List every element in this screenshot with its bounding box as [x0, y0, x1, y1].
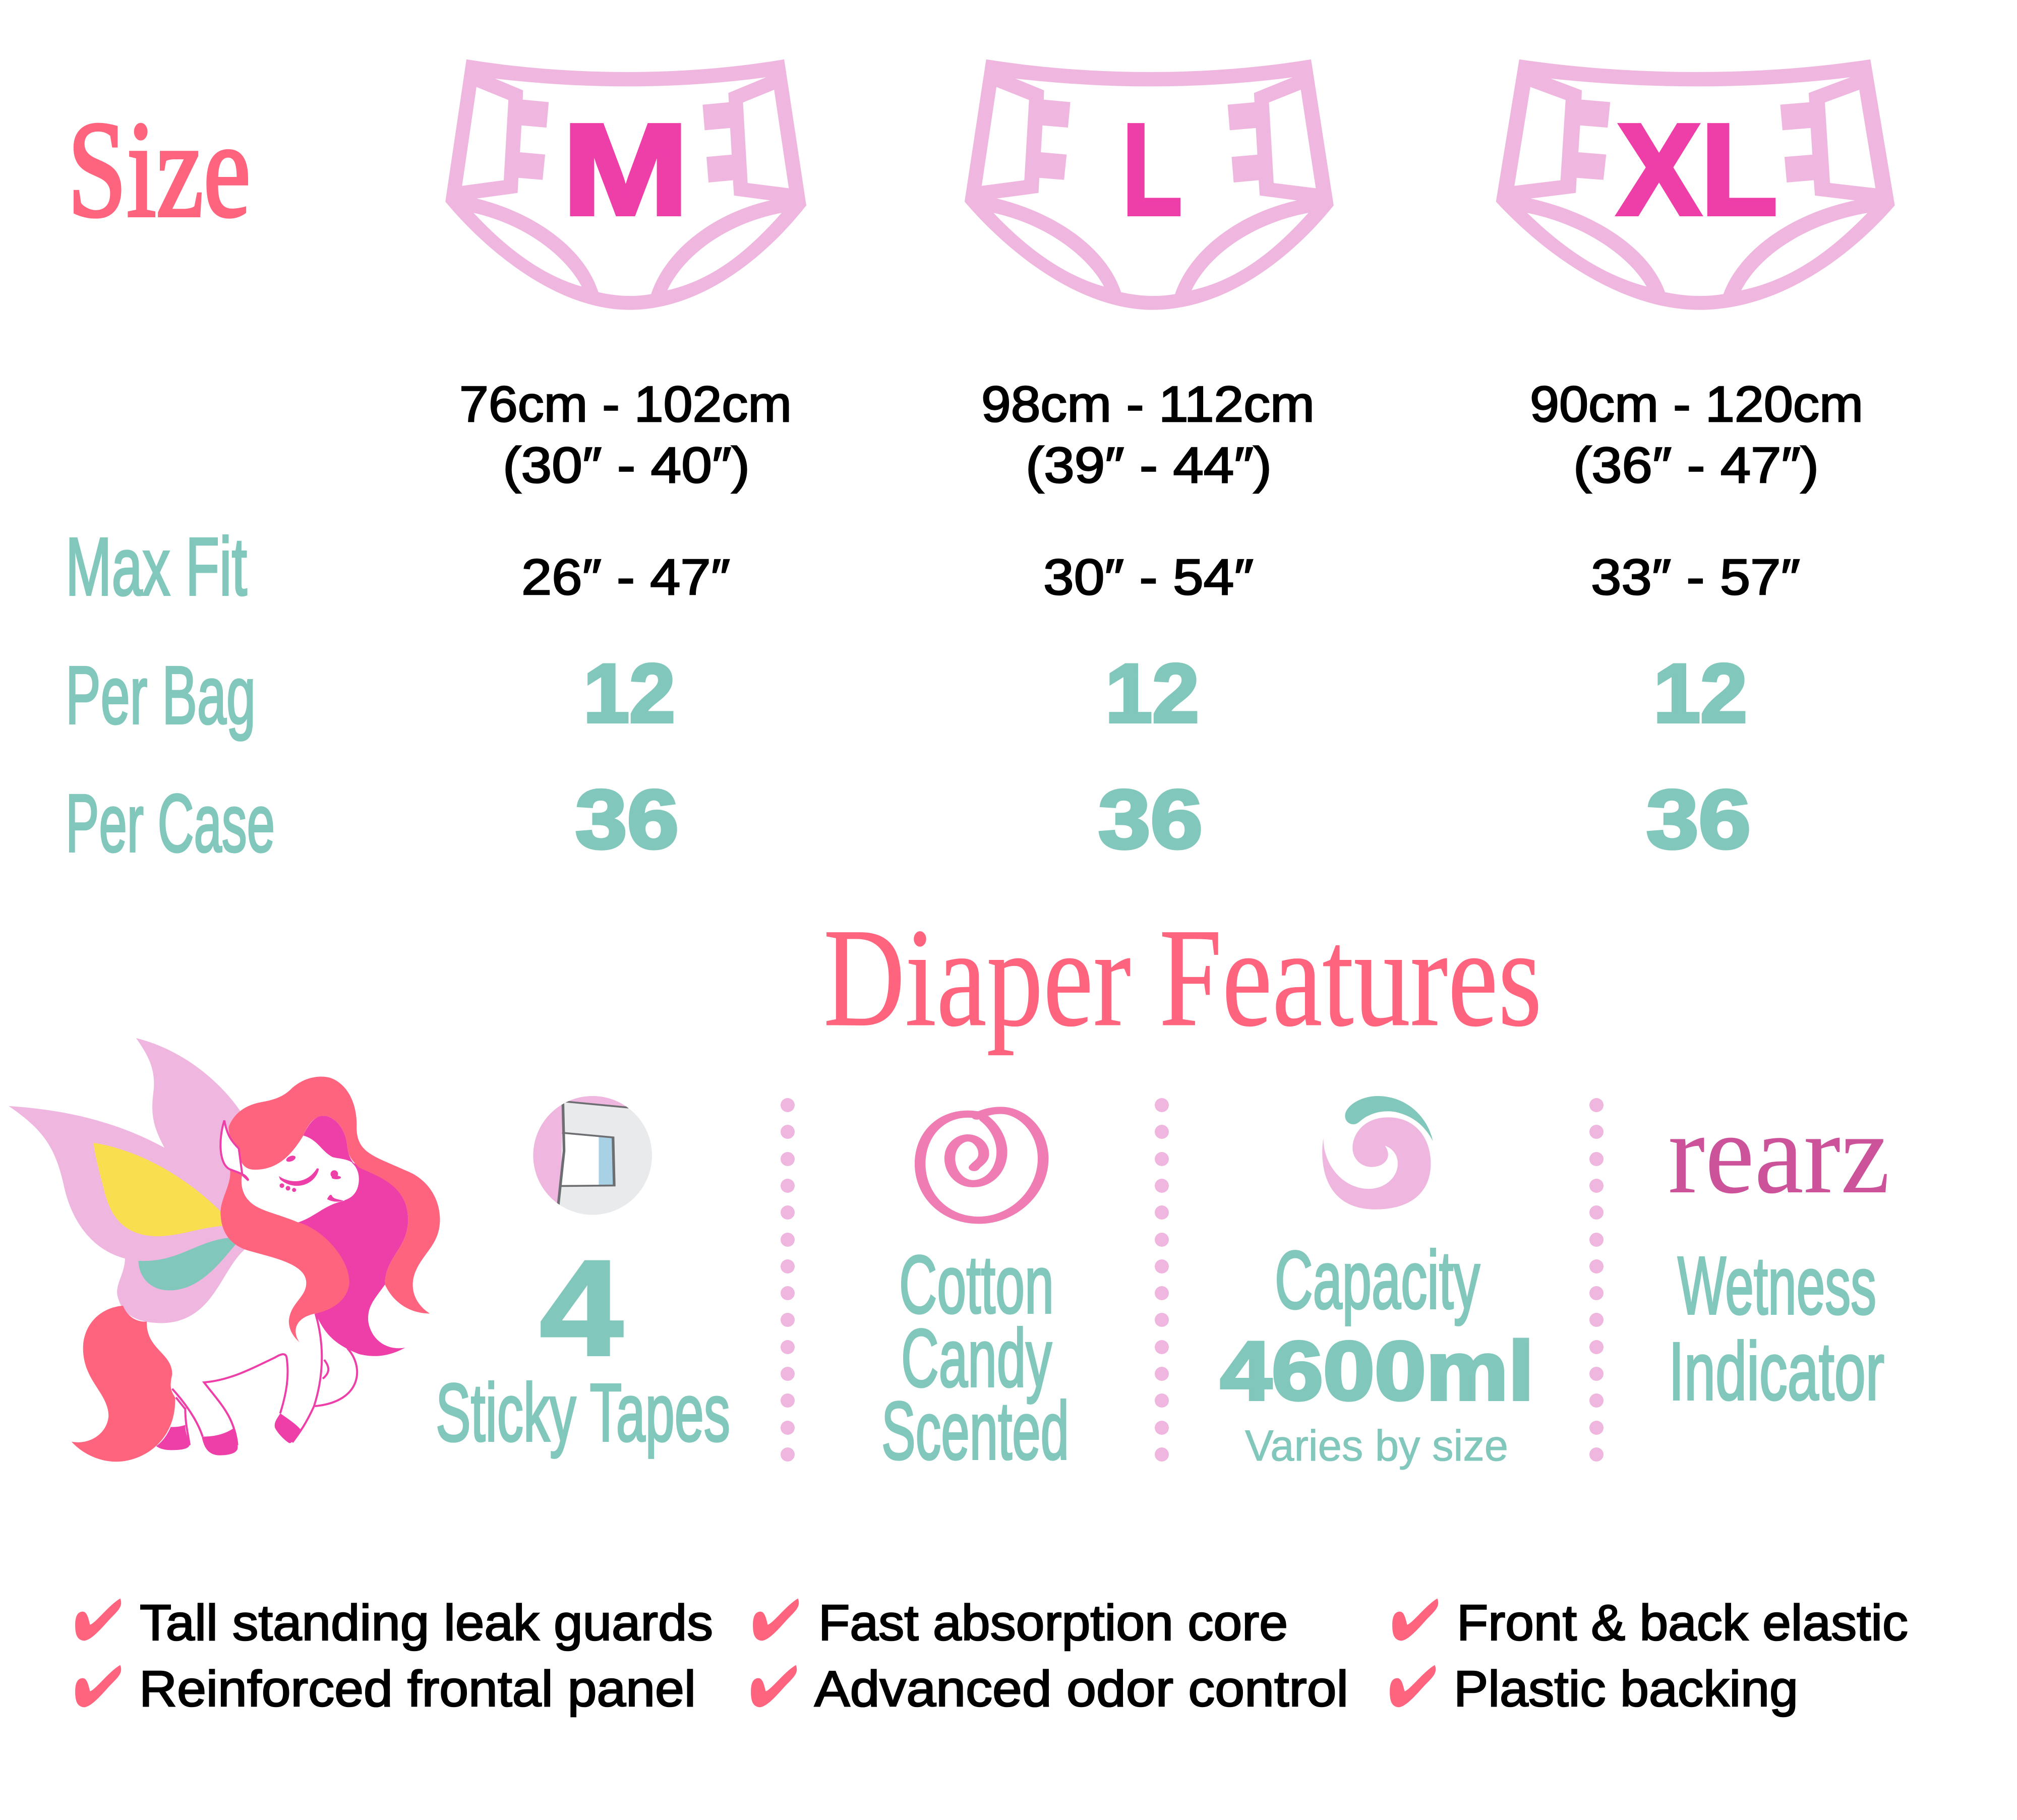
- row label: Per Bag: Per Bag: [66, 649, 256, 741]
- size letter M: M: [562, 97, 689, 242]
- label: Wetness: [1678, 1239, 1876, 1331]
- number 4: 4: [540, 1232, 624, 1383]
- icon: tape: [531, 1094, 655, 1218]
- feature: cotton candy scented: [881, 1110, 1069, 1477]
- tail: [72, 1306, 175, 1462]
- icon: diaper M: [445, 59, 806, 310]
- head: [239, 1135, 359, 1223]
- per bag XL: 12: [1653, 647, 1747, 740]
- label: [881, 1238, 1069, 1477]
- face details: [279, 1155, 343, 1202]
- label: Sticky Tapes: [436, 1366, 730, 1459]
- waist range L: 98cm - 112cm: [981, 376, 1315, 433]
- label: [1669, 1239, 1884, 1417]
- note: Varies by size: [1245, 1422, 1508, 1470]
- heading: Size: Size: [68, 93, 251, 246]
- waist range XL: 90cm - 120cm: [1530, 376, 1863, 433]
- feature: capacity: [1220, 1096, 1534, 1470]
- top mane: [228, 1076, 440, 1313]
- feature: wetness indicator: [1668, 1089, 1890, 1417]
- row label: Max Fit: Max Fit: [66, 520, 247, 613]
- wings: [9, 1038, 246, 1323]
- dotted divider 2: [1155, 1098, 1169, 1462]
- body outline: [172, 1313, 357, 1445]
- item: advanced odor control: Advanced odor control: [814, 1661, 1348, 1717]
- label: Indicator: [1669, 1325, 1884, 1417]
- label: Scented: [881, 1384, 1069, 1477]
- dotted divider 1: [781, 1098, 795, 1462]
- item: fast absorption core: Fast absorption core: [818, 1595, 1288, 1651]
- label: Cotton: [899, 1238, 1054, 1330]
- max fit M: 26″ - 47″: [521, 549, 730, 605]
- item: plastic backing: Plastic backing: [1454, 1661, 1798, 1717]
- fringe: [304, 1116, 354, 1165]
- waist range XL: [1530, 376, 1863, 494]
- heading: Diaper Features: Diaper Features: [823, 899, 1542, 1056]
- logo: rearz: rearz: [1668, 1089, 1890, 1218]
- per case M: 36: [575, 773, 679, 866]
- item: tall standing leak guards: Tall standing leak guards: [140, 1595, 713, 1651]
- label: Candy: [901, 1312, 1052, 1404]
- per bag M: 12: [583, 647, 675, 740]
- waist range L: (39″ - 44″): [1026, 437, 1272, 494]
- icon: spiral: [920, 1110, 1043, 1220]
- max fit L: 30″ - 54″: [1043, 549, 1254, 605]
- size letter XL: XL: [1617, 97, 1777, 242]
- waist range M: [459, 376, 792, 494]
- max fit XL: 33″ - 57″: [1591, 549, 1800, 605]
- waist range L: [981, 376, 1315, 494]
- waist range M: 76cm - 102cm: [459, 376, 792, 433]
- checklist: [75, 1595, 1908, 1717]
- back mane: [298, 1162, 408, 1356]
- per case L: 36: [1098, 773, 1203, 866]
- icon: diaper L: [965, 59, 1334, 310]
- per bag L: 12: [1105, 647, 1199, 740]
- waist range XL: (36″ - 47″): [1573, 437, 1819, 494]
- feature: sticky tapes: [436, 1094, 730, 1459]
- item: reinforced frontal panel: Reinforced frontal panel: [139, 1661, 696, 1717]
- value: 4600ml: [1220, 1324, 1534, 1417]
- dotted divider 3: [1589, 1098, 1604, 1462]
- icon: diaper XL: [1496, 59, 1895, 310]
- hooves: [156, 1413, 301, 1455]
- per case XL: 36: [1646, 773, 1751, 866]
- waist range M: (30″ - 40″): [503, 437, 750, 494]
- size letter L: L: [1122, 97, 1182, 242]
- item: front and back elastic: Front & back elastic: [1457, 1595, 1908, 1651]
- illustration: fairy unicorn: [9, 1038, 440, 1462]
- icon: swirl: [1322, 1096, 1433, 1209]
- front mane: [220, 1170, 349, 1343]
- ear: [220, 1121, 248, 1180]
- label: Capacity: [1275, 1234, 1480, 1326]
- row label: Per Case: Per Case: [66, 777, 275, 869]
